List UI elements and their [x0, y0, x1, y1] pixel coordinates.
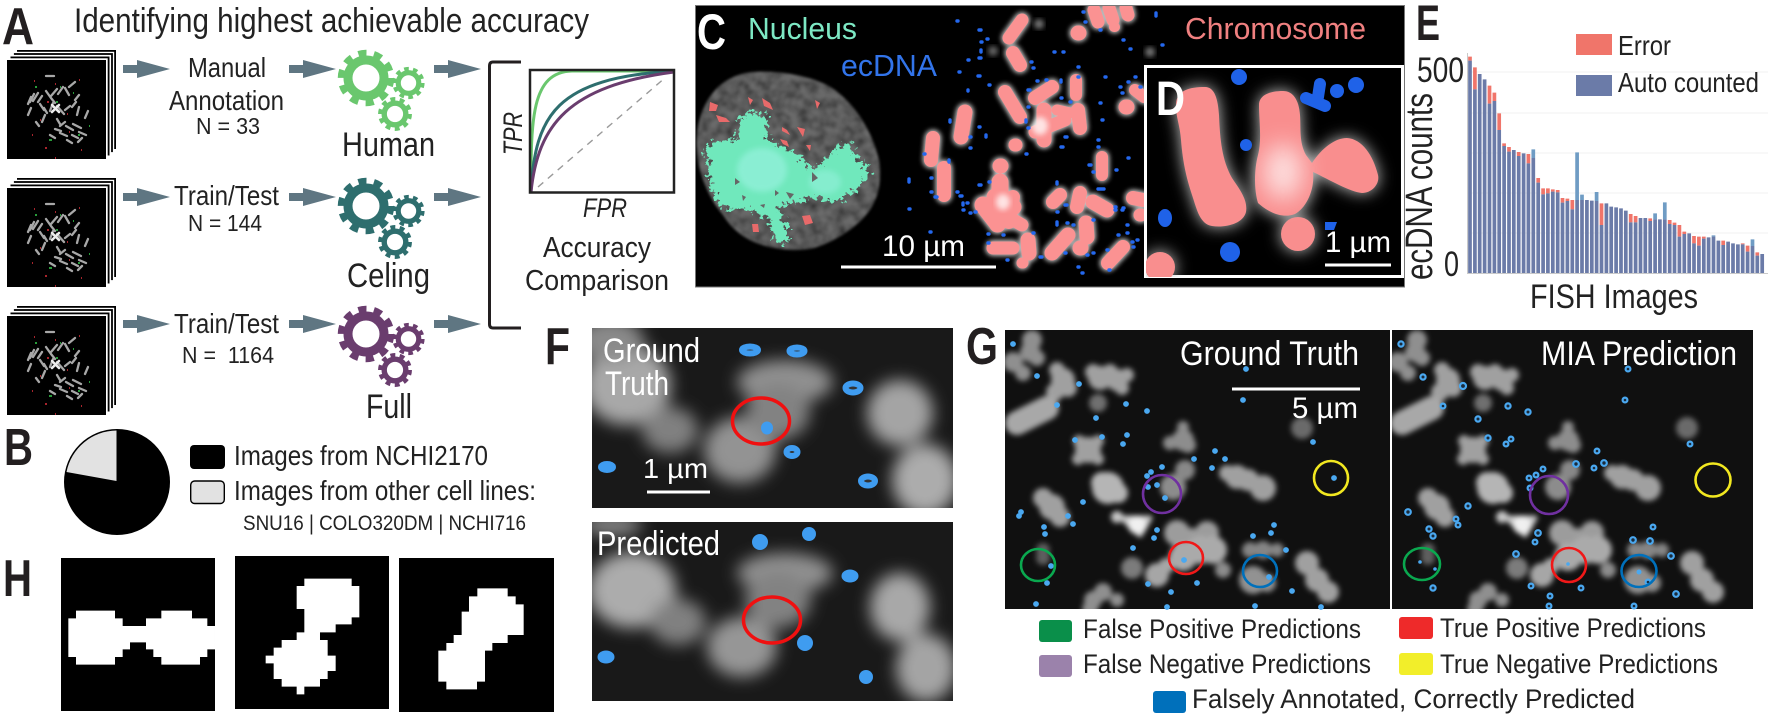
panel letter F: F: [545, 318, 570, 376]
panel letter D: D: [1156, 73, 1185, 126]
arrows column 2: [289, 60, 336, 333]
MIA prediction image: [1388, 330, 1753, 617]
Ground Truth label: Truth: [605, 365, 669, 403]
panel letter B: B: [4, 419, 33, 477]
pie legend: Images from NCHI2170: [234, 440, 488, 471]
scale bar 5 um: [1232, 388, 1360, 425]
chromosomes: [931, 8, 1144, 263]
ground truth image: [1003, 330, 1390, 617]
row 1 label: Annotation: [169, 85, 284, 116]
predicted ecDNA ring markers: [1398, 341, 1692, 608]
row 3 label: [174, 308, 279, 368]
panel letter H: H: [3, 550, 32, 608]
icon: green gears: [341, 53, 423, 129]
ROC chart: TPR: [498, 112, 528, 155]
icon: teal gears: [341, 181, 423, 257]
nucleus segmentation mask: [703, 112, 870, 243]
scale bar 1 um: 1 µm: [643, 453, 708, 484]
scale bar 1 um: 1 µm: [1325, 226, 1391, 259]
prediction legend: [1039, 613, 1718, 714]
inset ecDNA blobs: [1158, 69, 1364, 262]
Ground Truth label: Ground Truth: [1180, 335, 1359, 373]
panel A: accuracy workflow: [2, 0, 674, 426]
nucleus red speckles: [709, 97, 820, 232]
accuracy comparison label: Comparison: [525, 265, 669, 297]
panel C: FISH segmentation image: [696, 4, 1404, 287]
prediction legend: Falsely Annotated, Correctly Predicted: [1192, 684, 1635, 714]
predicted image: [582, 513, 956, 702]
row 2 label: Train/Test: [174, 180, 279, 211]
y axis title: ecDNA counts: [1399, 93, 1441, 280]
pie chart: [64, 429, 170, 535]
highlight circles: [1021, 461, 1348, 587]
panel G: ground truth versus MIA prediction: [966, 318, 1753, 714]
MIA Prediction label: MIA Prediction: [1541, 335, 1737, 373]
pie legend: SNU16 | COLO320DM | NCHI716: [243, 512, 526, 535]
row 2 label: N = 144: [188, 210, 262, 236]
panel B: pie chart and legend: [4, 419, 536, 535]
prediction legend: True Negative Predictions: [1440, 649, 1718, 679]
panel D: magnified inset: [1145, 66, 1402, 282]
mask 1: [61, 558, 215, 711]
highlight circles: [1404, 464, 1730, 587]
scale bar 10 um: 10 µm: [882, 230, 965, 263]
pie legend: [190, 440, 536, 535]
arrows column 3: [434, 60, 481, 333]
image stack row 3: [7, 306, 116, 415]
predicted small solid dots: [1418, 560, 1642, 574]
legend: [1576, 30, 1759, 98]
Predicted label: Predicted: [597, 525, 720, 563]
mask 2: [235, 556, 389, 709]
inset chromosomes: [1145, 87, 1378, 282]
panel E: bar chart: [1399, 0, 1768, 316]
scale bar 5 um: 5 µm: [1292, 392, 1358, 425]
image stack row 1: [7, 50, 116, 159]
red highlight ellipse: [732, 398, 790, 444]
panel letter G: G: [966, 318, 998, 376]
panel letter C: C: [697, 4, 726, 60]
label Chromosome: Chromosome: [1185, 11, 1366, 46]
title: Identifying highest achievable accuracy: [74, 2, 589, 40]
annotated ecDNA markers: [601, 346, 875, 486]
gear label Full: Full: [366, 388, 412, 426]
Ground Truth label: [603, 332, 700, 403]
row 2 label: [174, 180, 279, 236]
prediction legend: False Positive Predictions: [1083, 614, 1361, 644]
gear label Human: Human: [342, 126, 435, 164]
Ground Truth label: Ground: [603, 332, 700, 370]
ecDNA specks: [909, 12, 1163, 273]
ground truth ecDNA dots: [1010, 341, 1337, 610]
y axis tick 0: 0: [1444, 245, 1459, 284]
accuracy comparison label: [525, 232, 669, 297]
pie legend: Images from other cell lines:: [234, 475, 536, 506]
image stack row 2: [7, 178, 116, 287]
row 1 label: Manual: [188, 52, 266, 83]
row 3 label: N = 1164: [182, 342, 274, 368]
ground truth image: [592, 328, 953, 508]
icon: purple gears: [341, 309, 423, 385]
stacked bars: [1470, 57, 1762, 273]
predicted ecDNA markers: [598, 527, 873, 684]
label ecDNA: ecDNA: [841, 48, 937, 83]
prediction legend: False Negative Predictions: [1083, 649, 1371, 679]
panel H: binary masks: [3, 550, 554, 712]
prediction legend: True Positive Predictions: [1440, 613, 1706, 643]
row 1 label: N = 33: [196, 113, 260, 139]
nucleus: [697, 72, 880, 250]
y axis tick 500: 500: [1417, 51, 1464, 90]
row 3 label: Train/Test: [174, 308, 279, 339]
scale bar 10 um: [841, 230, 996, 268]
red highlight ellipse: [744, 597, 800, 643]
arrows column 1: [123, 60, 170, 333]
bracket: [490, 62, 521, 328]
ROC chart: [498, 70, 674, 223]
accuracy comparison label: Accuracy: [543, 232, 651, 264]
row 1 label: [169, 52, 284, 139]
x axis title: FISH Images: [1530, 278, 1698, 316]
panel F: ground truth versus predicted: [545, 318, 958, 702]
label Nucleus: Nucleus: [748, 11, 857, 46]
gear label Celing: Celing: [347, 257, 430, 295]
legend: Error: [1618, 30, 1671, 61]
ROC chart: FPR: [583, 193, 627, 223]
mask 3: [399, 558, 554, 712]
